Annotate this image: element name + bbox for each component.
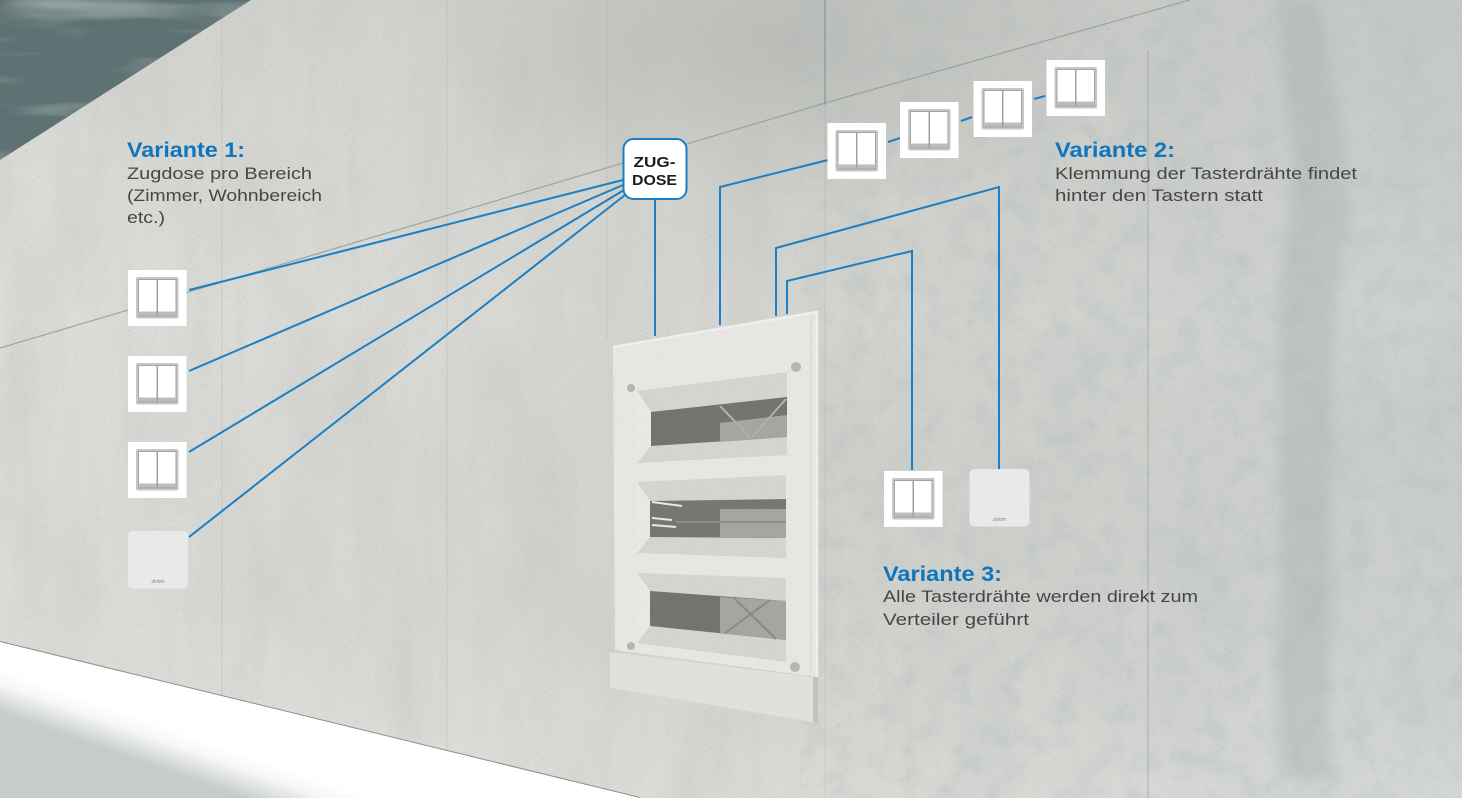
wires: variante 3 bbox=[776, 187, 999, 470]
switches: variante 2 bbox=[828, 60, 1105, 179]
text: variante 1: (Zimmer, Wohnbereich bbox=[127, 186, 322, 205]
text: variante 3: Variante 3: bbox=[883, 563, 1002, 586]
switches: variante 1 bbox=[128, 270, 188, 588]
row 2 bbox=[637, 475, 786, 558]
wire: zugdose to distribution board bbox=[654, 199, 656, 336]
junction box bbox=[624, 139, 686, 199]
screws bbox=[627, 362, 801, 672]
junction box: ZUG- bbox=[634, 154, 676, 171]
text: variante 2: hinter den Tastern statt bbox=[1055, 186, 1263, 205]
text: variante 1 bbox=[127, 139, 322, 227]
text: variante 1: Zugdose pro Bereich bbox=[127, 164, 312, 183]
wires: variante 2 bbox=[720, 96, 1045, 325]
switches: variante 3 bbox=[884, 469, 1030, 527]
junction box: DOSE bbox=[632, 172, 677, 189]
row 1 bbox=[637, 372, 787, 463]
cover panel bbox=[613, 312, 818, 677]
text: variante 3: Alle Tasterdrähte werden direkt zum bbox=[883, 587, 1198, 606]
text: variante 1: Variante 1: bbox=[127, 139, 245, 162]
text: variante 2 bbox=[1055, 139, 1357, 205]
wires: variante 1 bbox=[189, 180, 625, 537]
text: variante 3 bbox=[883, 563, 1198, 629]
text: variante 2: Klemmung der Tasterdrähte findet bbox=[1055, 164, 1357, 183]
floor bbox=[0, 642, 640, 798]
ceiling bbox=[0, 0, 260, 165]
distribution board bbox=[610, 310, 818, 722]
text: variante 3: Verteiler geführt bbox=[883, 610, 1029, 629]
text: variante 1: etc.) bbox=[127, 208, 165, 227]
lower cover strip bbox=[610, 652, 818, 723]
text: variante 2: Variante 2: bbox=[1055, 139, 1175, 162]
row 3 bbox=[637, 573, 786, 662]
